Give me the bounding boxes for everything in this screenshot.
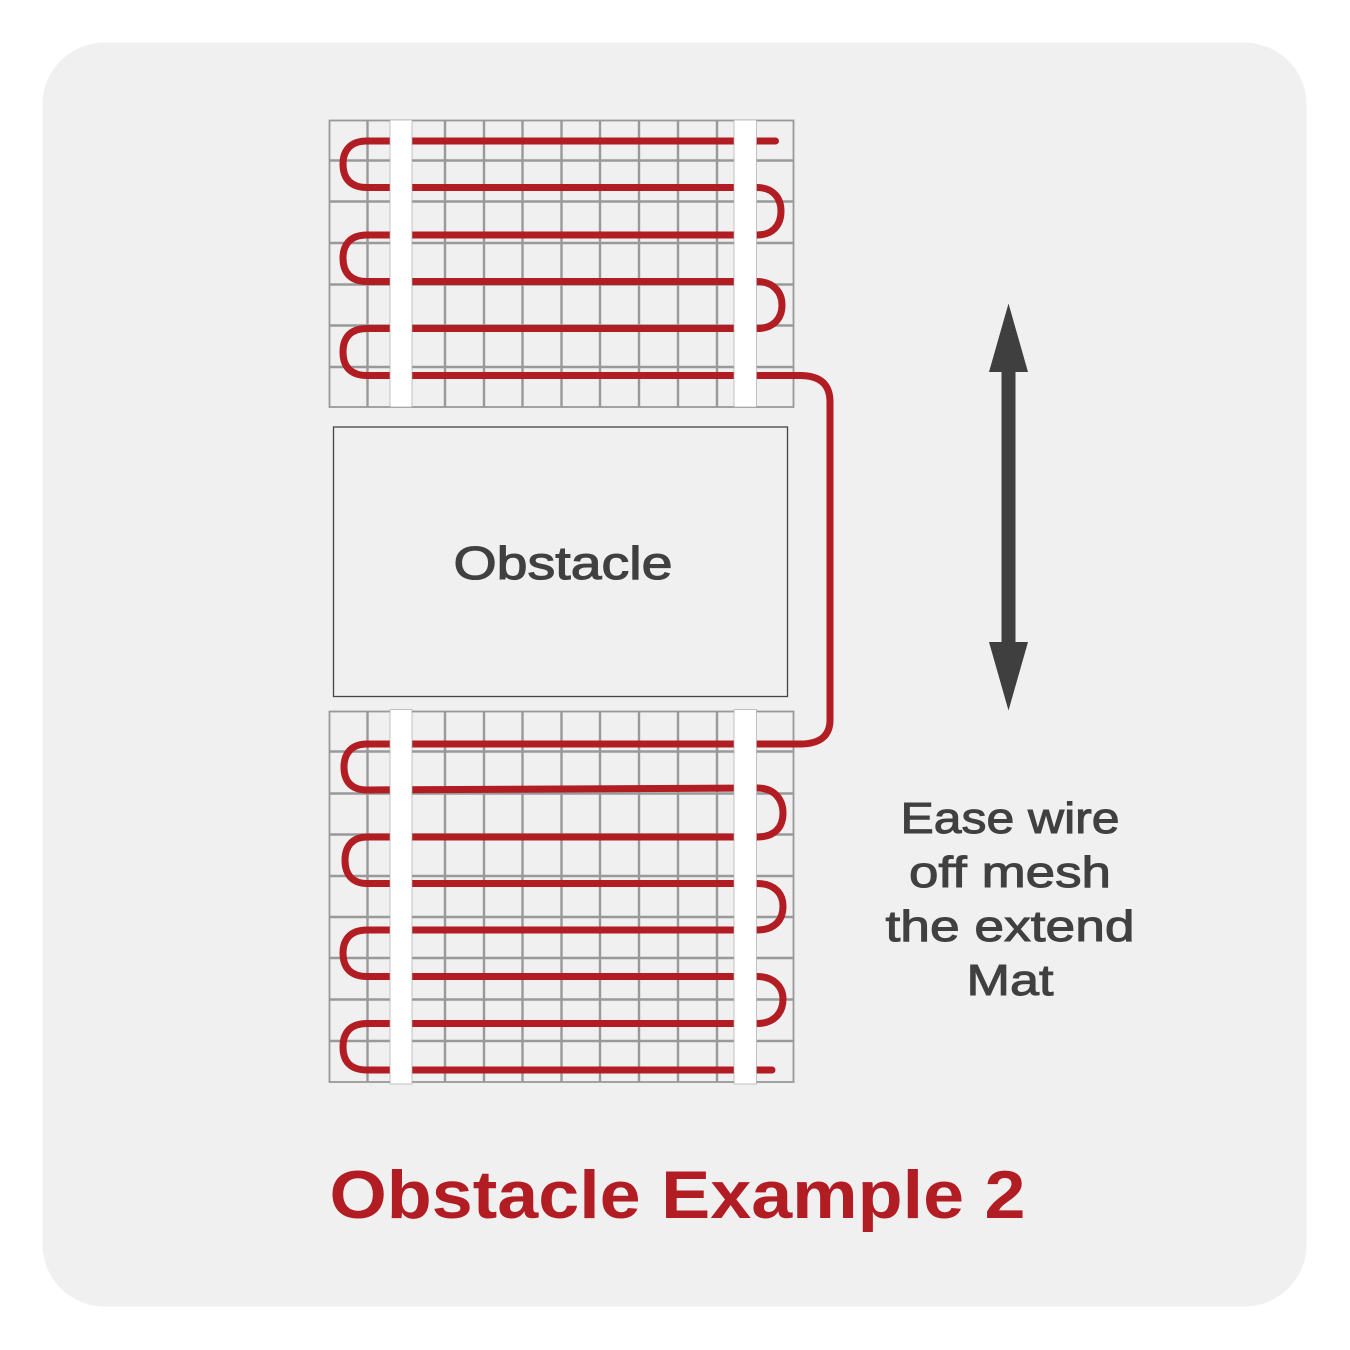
extension wire around obstacle <box>757 376 830 744</box>
title: Obstacle Example 2 <box>330 1157 1026 1233</box>
bottom heating mat <box>329 710 794 1084</box>
obstacle label: Obstacle <box>454 537 672 589</box>
top left fixing strip <box>390 120 412 407</box>
instruction text: the extend <box>886 902 1134 951</box>
instruction text <box>886 794 1134 1005</box>
top mesh grid <box>329 120 794 407</box>
top right fixing strip <box>734 120 756 407</box>
double-headed arrow <box>989 304 1028 710</box>
obstacle box <box>334 427 788 696</box>
bottom left fixing strip <box>390 710 412 1084</box>
top heating wire <box>343 141 782 376</box>
instruction text: off mesh <box>909 848 1111 897</box>
instruction text: Mat <box>966 956 1054 1005</box>
bottom right fixing strip <box>734 710 756 1084</box>
instruction text: Ease wire <box>900 794 1120 843</box>
top heating mat <box>329 120 794 407</box>
bottom mesh grid <box>329 711 794 1082</box>
bottom heating wire <box>343 744 783 1070</box>
